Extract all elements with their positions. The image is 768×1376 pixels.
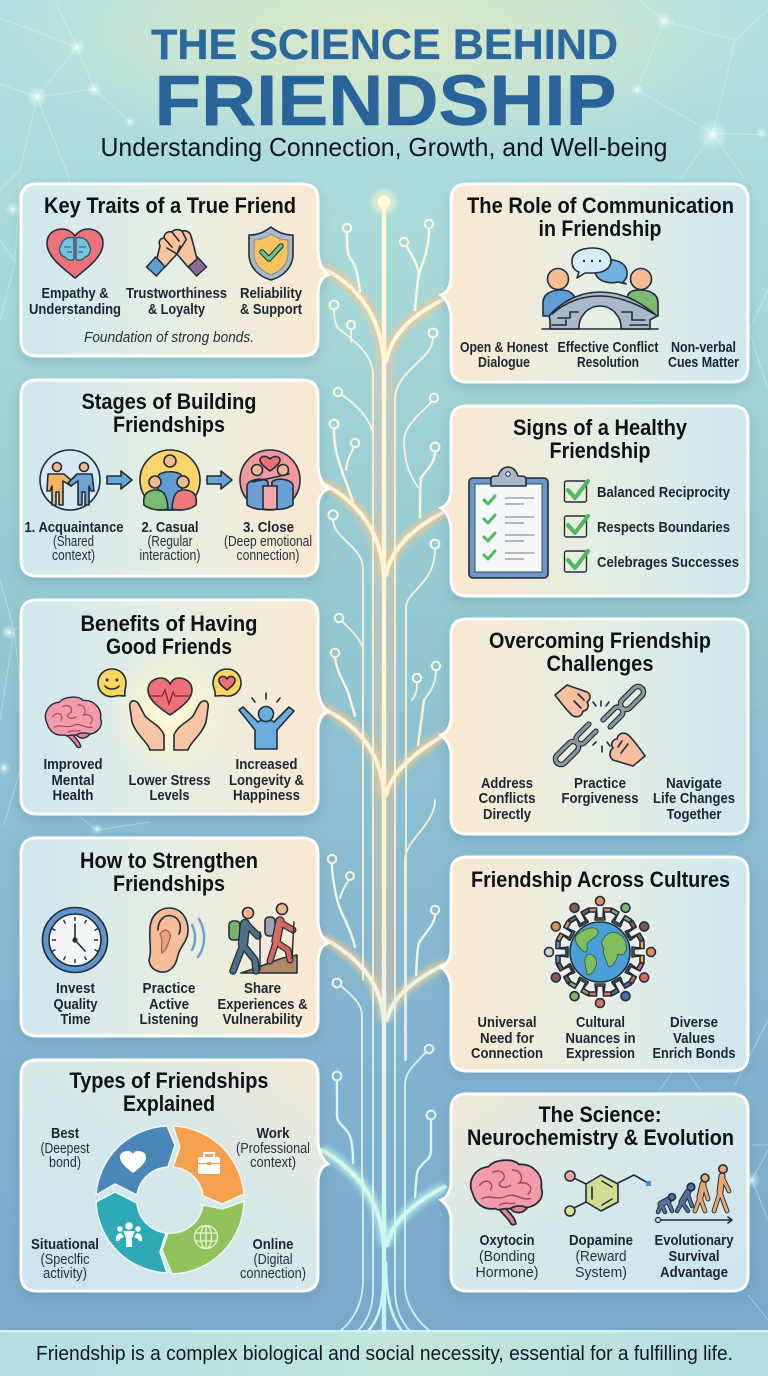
heading: How to Strengthen [80, 848, 258, 873]
labels: Cultural [576, 1014, 625, 1031]
labels: Diverse [670, 1014, 718, 1031]
labels: Lower Stress [128, 772, 210, 789]
icon: acquaintance [40, 450, 100, 510]
icon: globe [194, 1225, 218, 1249]
arrow [107, 471, 132, 489]
icon: broken chain and hands [553, 684, 646, 767]
labels: Nuances in [566, 1030, 636, 1047]
tree main branches [320, 204, 448, 1331]
icon: globe with ring of people [544, 896, 656, 1008]
item: celebrates successes: Celebrages Successes [597, 554, 739, 571]
heading [489, 628, 711, 676]
panel: strengthen [21, 838, 328, 1036]
labels: (Deep emotional [224, 533, 312, 550]
title line 1: THE SCIENCE BEHIND [151, 21, 618, 69]
labels: 1. Acquaintance [24, 519, 124, 536]
labels: Expression [566, 1045, 635, 1062]
labels: Navigate [666, 775, 722, 792]
tree nodes [328, 220, 440, 1119]
labels: Enrich Bonds [652, 1045, 736, 1062]
labels: Health [52, 787, 94, 804]
icon: heart [120, 1151, 146, 1173]
labels: Need for [480, 1030, 534, 1047]
arrow [207, 471, 232, 489]
heading: Friendships [113, 412, 225, 437]
labels: Active [149, 996, 189, 1013]
labels [31, 1125, 310, 1282]
icon: briefcase [197, 1153, 221, 1174]
heading [467, 1102, 734, 1150]
heading [82, 389, 256, 437]
labels [471, 1014, 736, 1062]
central neural tree [320, 186, 448, 1331]
labels: Mental [52, 772, 94, 789]
icon: casual [140, 450, 200, 510]
labels: System) [575, 1264, 627, 1281]
panel: communication [441, 184, 748, 382]
icon: shield [249, 227, 293, 280]
icon: heart with brain [47, 229, 103, 278]
panel: cultures [441, 857, 748, 1071]
item: balanced reciprocity [564, 481, 731, 502]
icon: caring hands with heart [107, 650, 231, 774]
labels: Improved [44, 756, 102, 773]
icon: people [116, 1222, 142, 1247]
panel: science [441, 1094, 748, 1291]
panel: signs [441, 406, 748, 596]
footer [0, 1330, 768, 1376]
labels: bond) [49, 1154, 81, 1171]
labels: Work [256, 1125, 290, 1142]
icon: brain [471, 1160, 542, 1225]
labels: Increased [236, 756, 298, 773]
labels: (Speclfic [40, 1251, 90, 1268]
labels: 3. Close [243, 519, 294, 536]
labels: Life Changes [653, 790, 735, 807]
labels: (Regular [148, 533, 192, 550]
labels: context) [52, 547, 95, 564]
labels: Time [60, 1011, 90, 1028]
labels: activity) [43, 1265, 87, 1282]
heading: Benefits of Having [80, 611, 258, 636]
labels: Evolutionary [654, 1232, 734, 1249]
icon: hikers [229, 904, 297, 973]
heading: Friendship Across Cultures [471, 867, 730, 892]
labels: 2. Casual [142, 519, 198, 536]
title line 2: FRIENDSHIP [154, 62, 616, 141]
labels: Dopamine [569, 1232, 633, 1249]
labels: Vulnerability [222, 1011, 303, 1028]
labels: Cues Matter [668, 354, 739, 371]
labels: connection) [240, 1265, 306, 1282]
labels: Directly [483, 806, 532, 823]
labels: Together [666, 806, 722, 823]
icon: bridge with people and speech bubbles [542, 248, 658, 329]
labels: Longevity & [229, 772, 304, 789]
labels: Dialogue [478, 354, 530, 371]
labels: interaction) [140, 547, 201, 564]
heading: Challenges [546, 651, 654, 676]
ring chart [96, 1126, 244, 1274]
labels [54, 980, 308, 1028]
labels: Reliability [240, 285, 303, 302]
checklist [564, 481, 739, 572]
labels: connection) [236, 547, 300, 564]
labels [476, 1232, 734, 1281]
labels [29, 285, 303, 318]
labels: Online [252, 1236, 294, 1253]
labels: Understanding [29, 301, 121, 318]
heading: Friendships [113, 871, 225, 896]
item: respects boundaries [564, 516, 730, 537]
labels: (Professional [236, 1140, 310, 1157]
labels: Listening [140, 1011, 198, 1028]
subtitle: Understanding Connection, Growth, and Well-being [100, 132, 668, 162]
item: balanced reciprocity: Balanced Reciprocity [597, 484, 731, 501]
labels: (Bonding [479, 1248, 535, 1265]
icon: smiley speech bubble [98, 669, 126, 697]
heading [80, 848, 258, 896]
icon: happy person [239, 693, 294, 749]
heading: Types of Friendships [70, 1068, 268, 1093]
labels: Survival [668, 1248, 720, 1265]
labels: Situational [31, 1236, 99, 1253]
heading: in Friendship [538, 216, 662, 241]
panel: key traits [21, 184, 328, 356]
heading: Good Friends [106, 634, 232, 659]
heading [80, 611, 258, 659]
panel: types [21, 1060, 328, 1291]
heading: Key Traits of a True Friend [44, 193, 296, 218]
thin tree lines [333, 310, 436, 1331]
panel: stages [21, 380, 328, 576]
labels: (Deepest [40, 1140, 90, 1157]
heading: Overcoming Friendship [489, 628, 711, 653]
labels: & Support [240, 301, 302, 318]
labels: Universal [478, 1014, 536, 1031]
tree shadow and glow [320, 267, 448, 1245]
labels: & Loyalty [148, 301, 206, 318]
labels [24, 519, 312, 564]
caption: Foundation of strong bonds. [84, 330, 254, 346]
labels: Resolution [577, 354, 639, 371]
icon: close [240, 450, 300, 510]
labels: Levels [150, 787, 190, 804]
labels: Quality [54, 996, 98, 1013]
labels: Invest [56, 980, 95, 997]
heading: Friendship [550, 438, 650, 463]
footer: Friendship is a complex biological and social necessity, essential for a fulfilling life. [36, 1343, 733, 1365]
labels: Practice [142, 980, 196, 997]
labels: Open & Honest [460, 339, 548, 356]
labels: Values [673, 1030, 715, 1047]
icon: dopamine molecule [565, 1171, 651, 1216]
labels: (Reward [576, 1248, 626, 1265]
labels: Advantage [660, 1264, 728, 1281]
labels: Conflicts [478, 790, 536, 807]
labels [478, 775, 735, 823]
labels: Address [481, 775, 533, 792]
panel: benefits [21, 600, 328, 814]
labels: Oxytocin [480, 1232, 534, 1249]
icon: brain [45, 697, 101, 748]
labels: Happiness [233, 787, 300, 804]
labels [460, 339, 739, 371]
labels: (Shared [53, 533, 94, 550]
labels: Trustworthiness [126, 285, 227, 302]
labels: Hormone) [476, 1264, 539, 1281]
heading: Stages of Building [82, 389, 256, 414]
heading: Explained [123, 1091, 215, 1116]
heading [70, 1068, 268, 1116]
labels: Connection [471, 1045, 543, 1062]
icon: handshake [151, 230, 202, 272]
tree top glowing node [368, 186, 400, 218]
labels: Forgiveness [562, 790, 638, 807]
labels: Best [51, 1125, 79, 1142]
labels: Practice [574, 775, 626, 792]
labels: Empathy & [42, 285, 109, 302]
labels: context) [250, 1154, 296, 1171]
labels: Share [244, 980, 281, 997]
item: respects boundaries: Respects Boundaries [597, 519, 730, 536]
panel: challenges [441, 619, 748, 834]
heading: The Science: [538, 1102, 662, 1127]
heading: The Role of Communication [467, 193, 734, 218]
heading: Neurochemistry & Evolution [467, 1125, 734, 1150]
icon: ear with sound waves [149, 908, 204, 972]
labels [44, 756, 304, 804]
labels: Non-verbal [671, 339, 736, 356]
labels: Effective Conflict [558, 339, 658, 356]
icon: evolution of humans [656, 1165, 732, 1223]
labels: (Digital [254, 1251, 292, 1268]
heading [467, 193, 734, 241]
icon: heart speech bubble [213, 669, 241, 696]
item: celebrates successes [564, 551, 739, 572]
heading: Signs of a Healthy [513, 415, 688, 440]
icon: clipboard [469, 467, 548, 578]
labels: Experiences & [218, 996, 308, 1013]
heading [513, 415, 688, 463]
icon: clock [42, 908, 108, 972]
